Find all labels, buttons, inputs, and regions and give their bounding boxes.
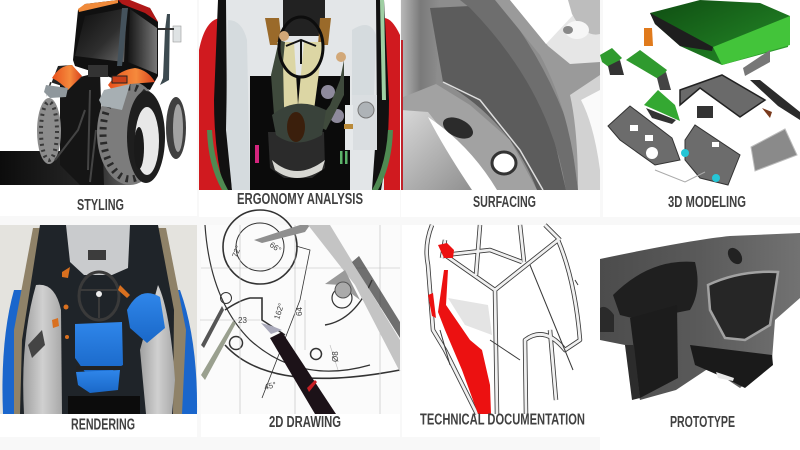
panel: technical documentation [402, 225, 600, 437]
dimensions on the drawing: 66° [268, 240, 283, 255]
panel: 2D drawing [200, 210, 400, 437]
label: technical documentation: TECHNICAL DOCUMENTATION [420, 412, 585, 428]
dimensions on the drawing: 72° [230, 244, 243, 259]
illustration: grey surface model [401, 0, 600, 190]
panel: styling [0, 0, 197, 216]
label: rendering: RENDERING [71, 416, 135, 434]
dimensions on the drawing: 162° [272, 302, 286, 321]
dimensions on the drawing: 45° [263, 380, 277, 392]
illustration: exploded 3D parts [600, 0, 800, 185]
label: styling: STYLING [77, 197, 124, 214]
label: 3D modeling: 3D MODELING [668, 194, 746, 211]
illustration: technical drawing with caliper and pen [200, 210, 400, 414]
illustration: operator seated in cab, top view [199, 0, 400, 190]
illustration: cab frame with red highlighted part [427, 225, 580, 414]
dimensions on the drawing: 64 [295, 307, 304, 316]
dimensions on the drawing: 23 [238, 316, 247, 325]
panel: ergonomy analysis [199, 0, 400, 217]
dimensions on the drawing [230, 240, 340, 392]
illustration: tractor rear view [0, 0, 186, 185]
panel: surfacing [401, 0, 600, 217]
dimensions on the drawing: Ø8 [331, 351, 340, 362]
label: prototype: PROTOTYPE [670, 414, 735, 431]
label: surfacing: SURFACING [473, 194, 536, 211]
panel: 3D modeling [600, 0, 800, 217]
label: 2D drawing: 2D DRAWING [269, 414, 341, 431]
panel: prototype [600, 225, 800, 450]
panel: rendering [0, 225, 197, 437]
illustration: blue cab interior top view [0, 225, 197, 414]
label: ergonomy analysis: ERGONOMY ANALYSIS [237, 191, 363, 208]
illustration: dashboard prototype [600, 233, 800, 400]
